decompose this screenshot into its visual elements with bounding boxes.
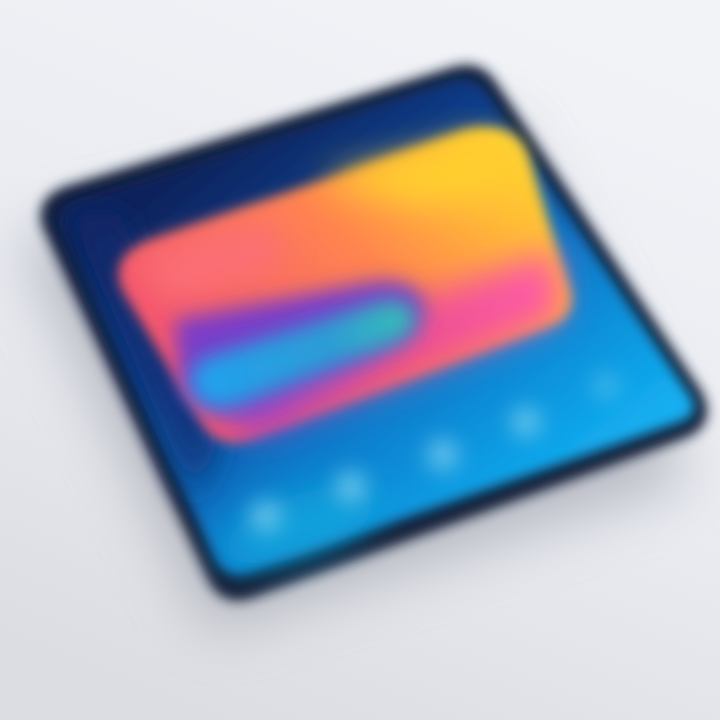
device screen	[58, 79, 694, 574]
screen left dark edge	[70, 215, 220, 500]
card lower pink band	[215, 250, 560, 436]
inner pill purple halo	[175, 281, 425, 413]
card left coral glow	[140, 222, 285, 300]
device body	[40, 65, 707, 601]
screen bottom-left cyan glow	[215, 471, 385, 579]
icon dot 1	[249, 499, 283, 533]
icon dot 2	[334, 470, 368, 504]
icon dot 4	[510, 406, 542, 438]
bottom icon row	[249, 372, 620, 533]
inner pill	[191, 301, 416, 408]
colourful card	[118, 127, 571, 442]
icon dot 3	[426, 438, 460, 472]
icon dot 5	[592, 372, 620, 400]
device shadow	[20, 120, 690, 630]
card yellow band	[320, 135, 515, 205]
